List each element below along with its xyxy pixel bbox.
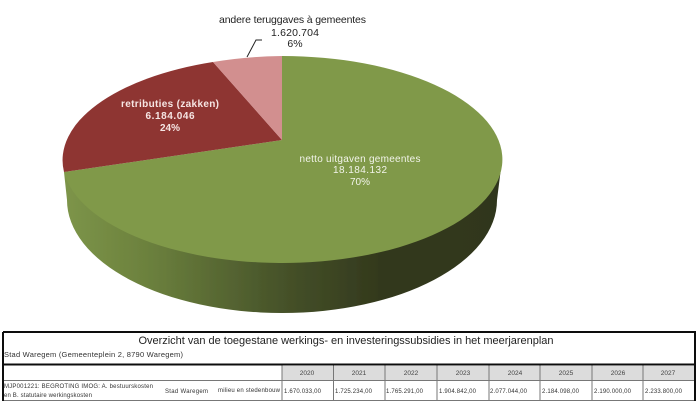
data row: 2.077.044,00 (490, 389, 528, 395)
data row: en B. statutaire werkingskosten (4, 393, 92, 399)
data row (4, 384, 683, 399)
label: retributies: retributies (zakken) (121, 99, 219, 110)
header row: 2021 (352, 370, 367, 377)
header row: 2022 (404, 370, 419, 377)
label: netto uitgaven gemeentes (300, 154, 420, 188)
label: retributies: 6.184.046 (146, 111, 195, 122)
header row: 2025 (559, 370, 574, 377)
header row: 2026 (611, 370, 626, 377)
label: andere teruggaves (219, 14, 366, 50)
table: subsidies (2, 332, 695, 401)
slice: andere teruggaves (213, 56, 282, 140)
data row: MJP001221: BEGROTING IMOG: A. bestuurskosten (4, 384, 153, 390)
pie side wall (64, 160, 502, 313)
header row: 2024 (508, 370, 523, 377)
data row: 1.765.291,00 (386, 389, 424, 395)
label: netto uitgaven gemeentes: 70% (350, 177, 370, 188)
data row: 1.725.234,00 (335, 389, 373, 395)
table title: Overzicht van de toegestane werkings- en investeringssubsidies in het meerjarenplan (138, 335, 554, 347)
data row: 1.670.033,00 (284, 389, 322, 395)
header row: 2023 (456, 370, 471, 377)
data row: 2.233.800,00 (645, 389, 683, 395)
header row: 2027 (661, 370, 676, 377)
slice: netto uitgaven gemeentes (64, 56, 502, 263)
data row: Stad Waregem (165, 389, 208, 395)
header row (282, 366, 694, 380)
data row: 1.904.842,00 (439, 389, 477, 395)
label: netto uitgaven gemeentes: 18.184.132 (333, 165, 387, 176)
label: retributies (121, 99, 219, 134)
pie chart (63, 56, 502, 313)
data row: 2.190.000,00 (594, 389, 632, 395)
label: andere teruggaves: andere teruggaves à gemeentes (219, 14, 366, 26)
data row: milieu en stedenbouw (218, 388, 281, 394)
table grid (2, 365, 695, 400)
label: andere teruggaves: 6% (287, 38, 303, 50)
label: netto uitgaven gemeentes: netto uitgaven gemeentes (300, 154, 420, 165)
table frame (3, 332, 695, 401)
data row: 2.184.098,00 (542, 389, 580, 395)
leader line (247, 40, 262, 57)
label: andere teruggaves: 1.620.704 (271, 27, 319, 39)
table subtitle: Stad Waregem (Gemeenteplein 2, 8790 Waregem) (4, 350, 184, 359)
header row: 2020 (300, 370, 315, 377)
slice: retributies (63, 62, 282, 172)
label: retributies: 24% (160, 123, 180, 134)
